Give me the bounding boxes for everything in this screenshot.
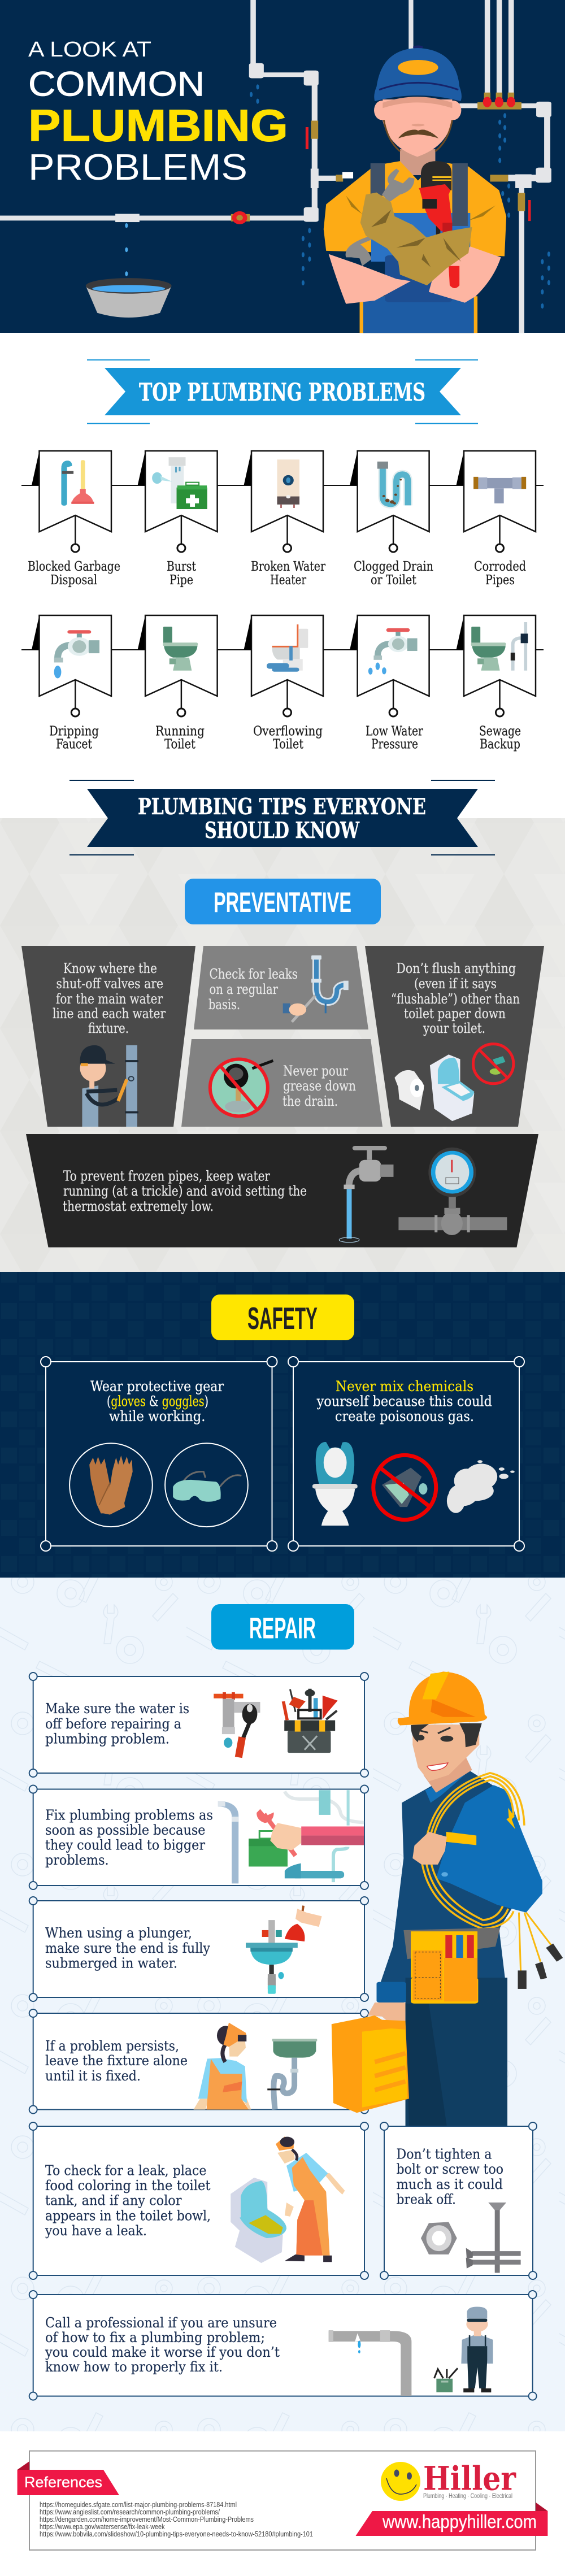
card: if a problem persists: If a problem persists, bbox=[45, 2038, 179, 2054]
card: never mix chemicals: create poisonous gas. bbox=[335, 1408, 474, 1425]
card: don't tighten a bolt too much: break off. bbox=[397, 2191, 456, 2208]
problem: sewage backup: Backup bbox=[480, 737, 520, 751]
card: wear protective gear: while working. bbox=[109, 1408, 206, 1425]
icon: dripping faucet bbox=[54, 630, 99, 679]
problem: running toilet: Running bbox=[155, 724, 205, 739]
card: call a professional: of how to fix a plumbing problem; bbox=[45, 2329, 265, 2345]
panel: prevent frozen pipes: thermostat extremely low. bbox=[63, 1198, 214, 1214]
problem: clogged drain or toilet bbox=[350, 451, 433, 588]
panel: don't flush anything: Don’t flush anything bbox=[397, 960, 516, 976]
problem: broken water heater: Broken Water bbox=[251, 559, 325, 574]
card: don't tighten a bolt too much: bolt or screw too bbox=[397, 2161, 503, 2177]
section heading: top plumbing problems: TOP PLUMBING PROBLEMS bbox=[139, 379, 425, 407]
card: make sure the water is off bbox=[29, 1673, 368, 1777]
panel: know where the shut-off valves are: for the main water bbox=[56, 991, 163, 1007]
card: if a problem persists: leave the fixture alone bbox=[45, 2052, 188, 2069]
panel: never pour grease: grease down bbox=[283, 1078, 356, 1094]
icon: overflowing toilet bbox=[267, 624, 308, 672]
icon: wrench and plunger bbox=[61, 460, 94, 506]
problem: clogged drain or toilet: Clogged Drain bbox=[354, 559, 433, 574]
footer frame bbox=[29, 2451, 536, 2550]
icon: toolbox bbox=[282, 1689, 338, 1753]
card: call a professional: you could make it worse if you don’t bbox=[45, 2344, 280, 2360]
logo: hiller smiley: Plumbing · Heating · Cooling · Electrical bbox=[423, 2492, 512, 2500]
icon: toilet bbox=[430, 1054, 474, 1121]
card: fix plumbing problems soon: Fix plumbing problems as bbox=[45, 1806, 213, 1823]
card: when using a plunger: When using a plunger, bbox=[45, 1925, 192, 1941]
icon: bucket bbox=[86, 278, 172, 318]
problem: corroded pipes bbox=[457, 451, 536, 588]
icon: low pressure faucet bbox=[368, 628, 418, 675]
references ribbon bbox=[18, 2461, 119, 2495]
card: never mix chemicals: Never mix chemicals bbox=[336, 1378, 473, 1395]
card: never mix chemicals: yourself because this could bbox=[316, 1393, 492, 1410]
icon: water heater bbox=[277, 459, 299, 508]
card: if a problem persists bbox=[29, 2009, 368, 2113]
card: when using a plunger bbox=[29, 1897, 368, 2001]
panel: never pour grease bbox=[181, 1039, 383, 1127]
icon: clogged s-trap bbox=[377, 462, 408, 505]
icon: nut and screws bbox=[421, 2203, 521, 2273]
panel: prevent frozen pipes: running (at a trickle) and avoid setting the bbox=[63, 1183, 307, 1199]
title bbox=[28, 38, 288, 188]
problem: dripping faucet: Dripping bbox=[49, 724, 99, 739]
icon: white toilet bbox=[312, 1442, 358, 1526]
problem: burst pipe: Pipe bbox=[169, 573, 193, 588]
label: safety: SAFETY bbox=[247, 1301, 318, 1336]
card: fix plumbing problems soon bbox=[29, 1786, 368, 1889]
icon: hand with wrench at leaking trap bbox=[283, 955, 349, 1022]
panel: know where the shut-off valves are: shut-off valves are bbox=[56, 975, 163, 992]
icon: burst pipe and first aid kit bbox=[152, 457, 207, 509]
icon: no chemicals sign bbox=[373, 1455, 436, 1520]
card: check for a leak with food coloring bbox=[29, 2122, 368, 2279]
illustration: plumber bbox=[324, 45, 506, 333]
card: fix plumbing problems soon: problems. bbox=[45, 1852, 109, 1868]
card: check for a leak with food coloring: you have a leak. bbox=[45, 2222, 147, 2239]
illustration: falling water drops bbox=[125, 84, 550, 309]
website ribbon: www.happyhiller.com bbox=[382, 2511, 537, 2532]
icon: hand with wrench, pipes and tool box bbox=[218, 1790, 364, 1883]
problem: burst pipe: Burst bbox=[167, 559, 197, 574]
problem: blocked garbage disposal bbox=[28, 451, 120, 588]
icon: woman with sink bbox=[193, 2023, 317, 2109]
panel: don't flush anything bbox=[365, 946, 544, 1127]
card: make sure the water is off: off before repairing a bbox=[45, 1715, 181, 1732]
hero panel bbox=[0, 0, 565, 333]
card: never mix chemicals bbox=[288, 1357, 524, 1551]
title: A LOOK AT bbox=[28, 38, 151, 62]
logo: hiller smiley bbox=[381, 2459, 516, 2501]
panel: check for leaks: on a regular bbox=[209, 981, 278, 997]
problem: broken water heater: Heater bbox=[270, 573, 306, 588]
icon: trickling faucet bbox=[339, 1146, 393, 1243]
label: repair: REPAIR bbox=[249, 1611, 316, 1645]
reference links: https://www.bobvila.com/slideshow/10-plumbing-tips-everyone-needs-to-know-52180#plumbing-101 bbox=[40, 2530, 313, 2538]
panel: never pour grease: Never pour bbox=[283, 1063, 348, 1079]
card: fix plumbing problems soon: soon as possible because bbox=[45, 1822, 206, 1838]
card: call a professional: Call a professional if you are unsure bbox=[45, 2314, 277, 2331]
problem: blocked garbage disposal: Disposal bbox=[50, 573, 97, 588]
card: check for a leak with food coloring: tank, and if any color bbox=[45, 2192, 182, 2209]
illustration: electrician with toolbox bbox=[332, 1671, 563, 2126]
problem: overflowing toilet: Overflowing bbox=[253, 724, 323, 739]
card: make sure the water is off: Make sure the water is bbox=[45, 1700, 189, 1717]
title: PROBLEMS bbox=[28, 146, 247, 188]
problem: sewage backup bbox=[457, 615, 536, 751]
panel: know where the shut-off valves are: line and each water bbox=[53, 1005, 166, 1022]
reference links bbox=[40, 2500, 313, 2538]
card: wear protective gear: (gloves & goggles) bbox=[107, 1393, 208, 1410]
icon: toilet and sewer pipes bbox=[471, 622, 528, 671]
icon: corroded t-pipe bbox=[473, 477, 526, 503]
problem: clogged drain or toilet: or Toilet bbox=[371, 573, 417, 588]
card: don't tighten a bolt too much: Don’t tighten a bbox=[397, 2146, 492, 2162]
panel: repair background bbox=[0, 1578, 565, 2431]
problem: blocked garbage disposal: Blocked Garbage bbox=[28, 559, 120, 574]
panel: preventative tips background bbox=[0, 818, 565, 1272]
problem: sewage backup: Sewage bbox=[479, 724, 521, 739]
section heading: top plumbing problems bbox=[87, 360, 478, 424]
problem: corroded pipes: Corroded bbox=[474, 559, 526, 574]
card: check for a leak with food coloring: To check for a leak, place bbox=[45, 2162, 207, 2178]
icon: no wipes sign bbox=[473, 1044, 514, 1084]
label: safety bbox=[211, 1294, 354, 1340]
problem: low water pressure bbox=[350, 615, 429, 751]
problem: low water pressure: Low Water bbox=[366, 724, 423, 739]
panel: check for leaks bbox=[194, 946, 368, 1029]
panel: don't flush anything: toilet paper down bbox=[404, 1005, 506, 1022]
panel: check for leaks: basis. bbox=[208, 996, 240, 1013]
icon: leaking pipe bbox=[329, 2330, 411, 2396]
card: wear protective gear bbox=[41, 1357, 277, 1551]
problem: running toilet bbox=[138, 615, 218, 751]
section heading: plumbing tips everyone should know: SHOULD KNOW bbox=[205, 818, 360, 844]
panel: don't flush anything: your toilet. bbox=[423, 1020, 485, 1036]
icon: toxic gas cloud bbox=[447, 1460, 515, 1513]
reference links: https://homeguides.sfgate.com/list-major-plumbing-problems-87184.html bbox=[40, 2500, 237, 2509]
icon: plunger over sink bbox=[246, 1906, 322, 1989]
reference links: https://www.angieslist.com/research/common-plumbing-problems/ bbox=[40, 2508, 220, 2516]
panel: prevent frozen pipes bbox=[26, 1134, 538, 1248]
panel: safety background bbox=[0, 1272, 565, 1578]
reference links: https://www.epa.gov/watersense/fix-leak-week bbox=[40, 2522, 165, 2531]
panel: check for leaks: Check for leaks bbox=[209, 966, 298, 982]
panel: know where the shut-off valves are: Know where the bbox=[63, 960, 157, 976]
problem: burst pipe bbox=[138, 451, 218, 588]
section heading: plumbing tips everyone should know bbox=[69, 780, 495, 855]
label: preventative bbox=[185, 879, 381, 924]
card: if a problem persists: until it is fixed. bbox=[45, 2067, 141, 2084]
icon: toilet with colored water bbox=[231, 2178, 286, 2263]
icon: faucet and wrench bbox=[214, 1692, 260, 1757]
icon: toilet paper roll bbox=[394, 1070, 424, 1110]
label: repair bbox=[211, 1604, 354, 1650]
icon: gloves in circle bbox=[69, 1443, 153, 1527]
card: check for a leak with food coloring: appears in the toilet bowl, bbox=[45, 2207, 211, 2223]
card: fix plumbing problems soon: they could lead to bigger bbox=[45, 1837, 205, 1853]
title: PLUMBING bbox=[28, 101, 288, 150]
card: make sure the water is off: plumbing problem. bbox=[45, 1731, 169, 1747]
panel: don't flush anything: “flushable”) other than bbox=[391, 991, 520, 1007]
problem: overflowing toilet: Toilet bbox=[273, 737, 304, 751]
problem: running toilet: Toilet bbox=[164, 737, 196, 751]
label: preventative: PREVENTATIVE bbox=[214, 887, 351, 918]
card: wear protective gear: Wear protective gear bbox=[90, 1378, 224, 1395]
title: COMMON bbox=[28, 64, 205, 103]
problem: dripping faucet: Faucet bbox=[56, 737, 93, 751]
card: don't tighten a bolt too much: much as it could bbox=[397, 2176, 503, 2192]
panel: don't flush anything: (even if it says bbox=[414, 975, 497, 992]
section heading: plumbing tips everyone should know: PLUMBING TIPS EVERYONE bbox=[138, 794, 426, 820]
card: call a professional bbox=[29, 2291, 537, 2400]
icon: pressure gauge on pipe bbox=[398, 1148, 507, 1235]
logo: hiller smiley: Hiller bbox=[423, 2459, 516, 2497]
icon: green toilet bbox=[163, 627, 198, 671]
icon: plumber with tool bucket bbox=[434, 2306, 493, 2392]
card: when using a plunger: make sure the end is fully bbox=[45, 1940, 210, 1956]
icon: worker at valve bbox=[80, 1045, 138, 1127]
icon: no grease down drain bbox=[210, 1059, 273, 1116]
panel: never pour grease: the drain. bbox=[282, 1093, 338, 1109]
reference links: https://dengarden.com/home-improvement/Most-Common-Plumbing-Problems bbox=[40, 2515, 254, 2523]
problem: low water pressure: Pressure bbox=[371, 737, 418, 751]
panel: prevent frozen pipes: To prevent frozen pipes, keep water bbox=[63, 1167, 270, 1184]
problem: dripping faucet bbox=[32, 615, 111, 751]
problem: broken water heater bbox=[244, 451, 325, 588]
icon: woman looking into toilet bbox=[276, 2136, 345, 2262]
references ribbon: References bbox=[24, 2474, 102, 2491]
illustration: pipes and valves bbox=[0, 0, 551, 333]
panel: know where the shut-off valves are bbox=[21, 946, 195, 1127]
problem: overflowing toilet bbox=[244, 615, 323, 751]
website ribbon bbox=[356, 2503, 547, 2536]
card: call a professional: know how to properly fix it. bbox=[45, 2358, 223, 2375]
card: check for a leak with food coloring: food coloring in the toilet bbox=[45, 2177, 211, 2193]
panel: know where the shut-off valves are: fixture. bbox=[88, 1020, 129, 1036]
problem: corroded pipes: Pipes bbox=[485, 573, 515, 588]
icon: drain pipe foot bbox=[268, 1978, 276, 1994]
connector lines behind problem badges bbox=[21, 485, 544, 650]
card: don't tighten a bolt too much bbox=[380, 2122, 537, 2279]
card: when using a plunger: submerged in water. bbox=[45, 1955, 177, 1971]
icon: goggles in circle bbox=[165, 1443, 248, 1527]
